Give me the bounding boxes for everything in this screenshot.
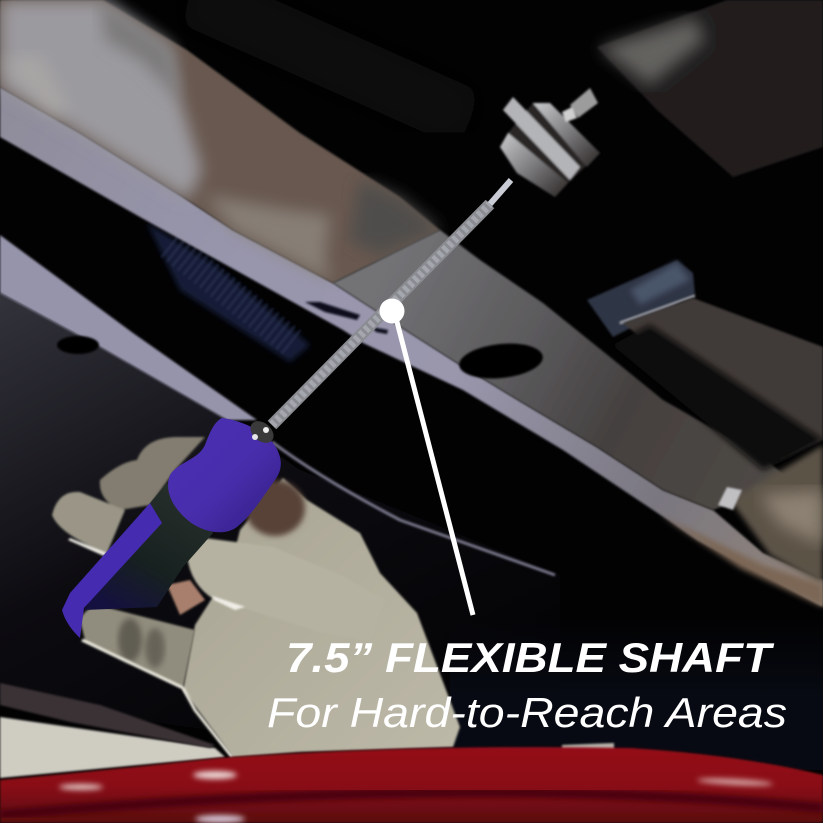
pinky finger [80,606,232,757]
callout leader line and dot [380,298,473,615]
dark strip above floor [0,683,215,748]
main beam lower band [0,87,823,607]
blue lit gusset [587,260,695,337]
lower sliver of frame [0,235,257,420]
handle lower purple strip [62,503,162,638]
oval hole in beam [457,340,545,382]
chrome ferrule [246,417,278,447]
dark lower panel [0,293,560,780]
slot in beam [305,302,388,334]
callout heading: 7.5” FLEXIBLE SHAFT [286,634,775,681]
upper right bracket [597,0,823,177]
right brown panel [612,298,823,470]
palm and wrist [183,478,460,757]
purple handle [62,417,281,638]
thumb [187,538,385,640]
blue coil spring [147,223,310,362]
brown stained back of palm [245,480,305,536]
thin frame edge [272,442,555,575]
red drum rim [0,747,823,823]
callout subheading: For Hard-to-Reach Areas [267,689,787,736]
socket adapter [500,88,600,197]
beam right face [333,230,790,510]
dark navy lower right area [450,620,823,770]
gloved hand [52,437,460,757]
upper coil spring [190,0,470,120]
rusted bracket piece [660,445,823,607]
small hole in lower panel [57,336,99,354]
handle purple head [168,418,281,532]
floor [0,717,225,778]
fingertip gap [167,580,205,615]
fingers behind handle [52,437,205,556]
flexible shaft [272,180,511,425]
floor sliver right [562,743,614,755]
main beam upper face [0,0,440,283]
handle dark grip [84,483,213,610]
